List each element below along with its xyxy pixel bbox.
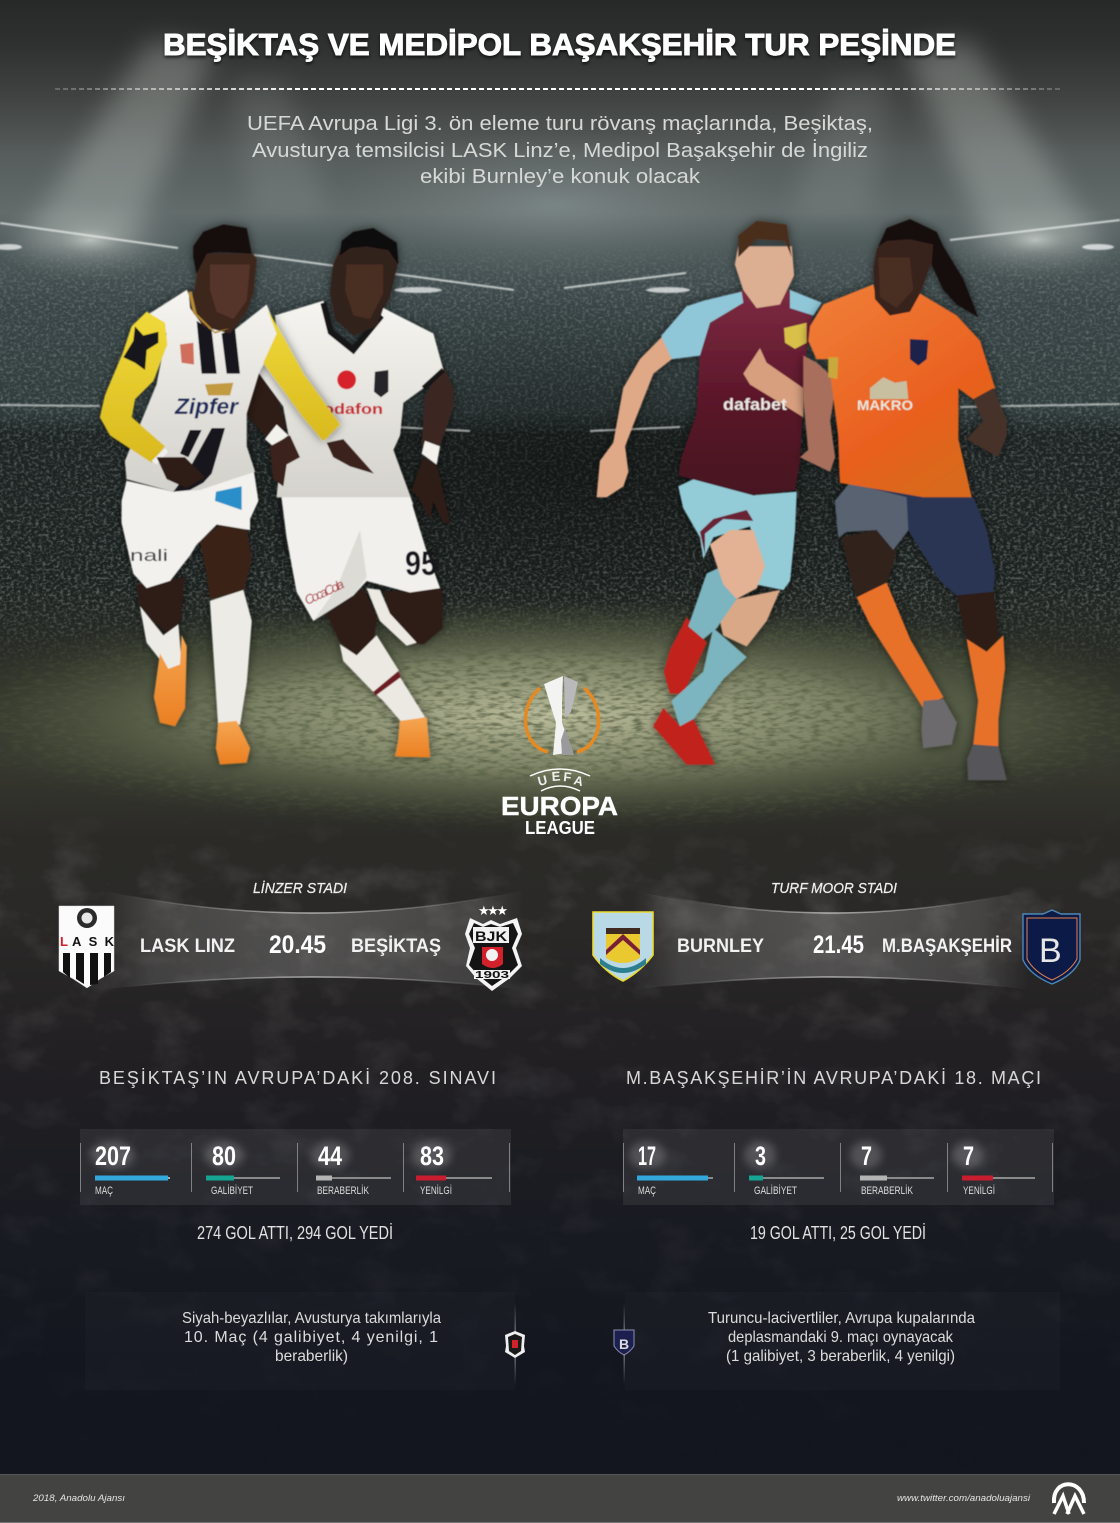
player: LASK Linz: Zipfer bbox=[174, 394, 239, 419]
stat: losses: YENİLGİ bbox=[420, 1184, 452, 1197]
icon: small Başakşehir crest bbox=[614, 1330, 634, 1355]
icon: small Başakşehir crest: B bbox=[619, 1336, 629, 1352]
player: LASK Linz: nali bbox=[130, 546, 168, 565]
stat: wins: 80 bbox=[212, 1141, 236, 1171]
logo: UEFA Europa League: U bbox=[536, 772, 549, 789]
kick-off time: 20.45 bbox=[269, 931, 326, 959]
team name: LASK Linz: LASK LINZ bbox=[140, 936, 235, 957]
player: Beşiktaş: 95 bbox=[405, 545, 437, 583]
note: Beşiktaş: Siyah-beyazlılar, Avusturya takımlarıyla bbox=[182, 1310, 441, 1327]
stat: wins: GALİBİYET bbox=[211, 1184, 253, 1197]
player: Beşiktaş: CocaCola bbox=[302, 576, 346, 608]
panel: Başakşehir stats bbox=[623, 1129, 1054, 1205]
stat: losses bbox=[952, 1141, 1035, 1197]
stat: draws: BERABERLİK bbox=[317, 1184, 369, 1197]
stat: matches: MAÇ bbox=[95, 1185, 113, 1197]
intro text bbox=[247, 112, 873, 188]
panel: Beşiktaş stats bbox=[80, 1129, 511, 1205]
player: Beşiktaş bbox=[243, 228, 453, 757]
logo: UEFA Europa League: EUROPA bbox=[501, 791, 618, 821]
icon: Anadolu Agency logo bbox=[1054, 1484, 1084, 1514]
icon: Başakşehir crest bbox=[1023, 910, 1080, 984]
icon: Beşiktaş crest: ★★★ bbox=[478, 903, 508, 918]
player: Başakşehir bbox=[800, 219, 1007, 780]
heading: Beşiktaş European record: BEŞİKTAŞ’IN AVRUPA’DAKİ 208. SINAVI bbox=[99, 1068, 496, 1088]
stat: wins: GALİBİYET bbox=[754, 1184, 797, 1197]
stat: draws: 7 bbox=[861, 1141, 872, 1171]
stat: draws bbox=[850, 1141, 934, 1197]
player: Başakşehir: MAKRO bbox=[857, 397, 913, 413]
icon: Burnley crest bbox=[593, 912, 653, 981]
stat: losses bbox=[412, 1141, 492, 1197]
icon: LASK crest: ASK bbox=[72, 934, 115, 949]
kick-off time: 21.45 bbox=[813, 931, 864, 959]
heading: Başakşehir European record: M.BAŞAKŞEHİR’İN AVRUPA’DAKİ 18. MAÇI bbox=[626, 1068, 1041, 1088]
note: Beşiktaş: beraberlik) bbox=[275, 1348, 348, 1365]
intro text: Avusturya temsilcisi LASK Linz’e, Medipol Başakşehir de İngiliz bbox=[252, 139, 868, 162]
stat: matches: 17 bbox=[638, 1141, 656, 1171]
stat: losses: YENİLGİ bbox=[963, 1184, 995, 1197]
note: Başakşehir: (1 galibiyet, 3 beraberlik, 4 yenilgi) bbox=[726, 1348, 955, 1365]
stat: matches bbox=[90, 1141, 170, 1197]
stat: wins bbox=[204, 1141, 280, 1197]
logo: UEFA Europa League bbox=[501, 676, 618, 838]
logo: UEFA Europa League: E bbox=[551, 768, 561, 784]
team name: Beşiktaş: BEŞİKTAŞ bbox=[351, 936, 441, 957]
icon: Beşiktaş crest: BJK bbox=[475, 928, 507, 944]
icon: Başakşehir crest: B bbox=[1039, 932, 1062, 970]
logo: UEFA Europa League: A bbox=[572, 772, 586, 789]
stat: losses: 7 bbox=[963, 1141, 974, 1171]
goals: Beşiktaş: 274 GOL ATTI, 294 GOL YEDİ bbox=[197, 1223, 393, 1243]
stadium name: Turf Moor: TURF MOOR STADI bbox=[771, 880, 897, 897]
stat: matches: 207 bbox=[95, 1141, 131, 1171]
stat: draws: 44 bbox=[318, 1141, 342, 1171]
note: Başakşehir bbox=[614, 1292, 1060, 1390]
note: Beşiktaş bbox=[85, 1292, 525, 1390]
team name: Burnley: BURNLEY bbox=[677, 936, 764, 957]
stadium name: Linzer: LİNZER STADI bbox=[253, 880, 347, 897]
stat: losses: 83 bbox=[420, 1141, 444, 1171]
stat: draws bbox=[310, 1141, 391, 1197]
player: Beşiktaş: odafon bbox=[323, 401, 383, 418]
team name: Başakşehir: M.BAŞAKŞEHİR bbox=[882, 936, 1012, 957]
stat: wins bbox=[744, 1141, 824, 1197]
footer bbox=[0, 1474, 1120, 1523]
icon: LASK crest: L bbox=[60, 934, 68, 949]
player: Burnley: dafabet bbox=[723, 395, 787, 414]
copyright: 2018, Anadolu Ajansı bbox=[32, 1493, 126, 1503]
intro text: UEFA Avrupa Ligi 3. ön eleme turu rövanş maçlarında, Beşiktaş, bbox=[247, 112, 873, 135]
title: BEŞİKTAŞ VE MEDİPOL BAŞAKŞEHİR TUR PEŞİNDE bbox=[163, 27, 956, 62]
logo: UEFA Europa League: LEAGUE bbox=[525, 818, 595, 838]
stat: wins: 3 bbox=[755, 1141, 766, 1171]
note: Başakşehir: Turuncu-lacivertliler, Avrupa kupalarında bbox=[708, 1310, 975, 1327]
logo: UEFA Europa League: F bbox=[563, 769, 572, 785]
stat: draws: BERABERLİK bbox=[861, 1184, 913, 1197]
player: LASK Linz bbox=[100, 225, 340, 764]
intro text: ekibi Burnley’e konuk olacak bbox=[420, 165, 701, 188]
icon: Beşiktaş crest: 1903 bbox=[475, 970, 510, 981]
note: Beşiktaş: 10. Maç (4 galibiyet, 4 yenilgi, 1 bbox=[184, 1329, 438, 1346]
player: Burnley bbox=[597, 221, 822, 764]
panel: LASK Linz vs Beşiktaş match bbox=[59, 880, 525, 991]
icon: small Beşiktaş crest bbox=[505, 1331, 525, 1358]
stat: matches: MAÇ bbox=[638, 1185, 656, 1197]
icon: Beşiktaş crest bbox=[465, 903, 522, 991]
icon: LASK crest bbox=[59, 906, 115, 988]
twitter url: www.twitter.com/anadoluajansi bbox=[897, 1493, 1031, 1504]
stat: matches bbox=[629, 1141, 713, 1197]
goals: Başakşehir: 19 GOL ATTI, 25 GOL YEDİ bbox=[750, 1223, 926, 1243]
note: Başakşehir: deplasmandaki 9. maçı oynayacak bbox=[728, 1329, 954, 1346]
panel: Burnley vs Başakşehir match bbox=[593, 880, 1080, 990]
